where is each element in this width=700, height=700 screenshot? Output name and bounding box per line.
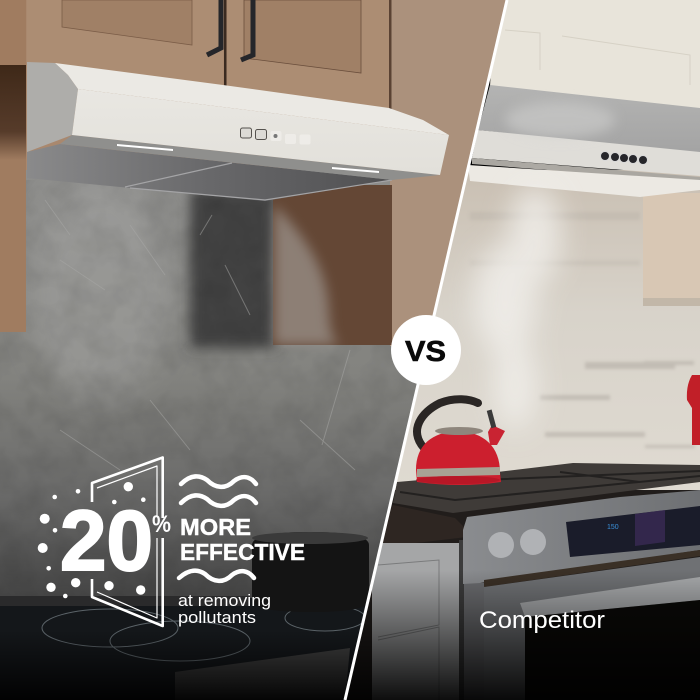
VS badge: VS bbox=[405, 336, 446, 368]
oven handle bbox=[520, 577, 700, 617]
hood dark strip bbox=[472, 158, 700, 182]
wave below headline bbox=[179, 571, 254, 581]
range knob left bbox=[488, 532, 514, 558]
range side trim bbox=[464, 583, 485, 700]
right upper door bbox=[227, 0, 389, 108]
subheading bbox=[178, 592, 271, 627]
left wall cabinet bbox=[0, 0, 26, 332]
hood underside bbox=[468, 165, 700, 197]
bottom dark fade bbox=[340, 570, 700, 700]
range body bbox=[463, 490, 700, 584]
cabinet door outline bbox=[378, 560, 439, 700]
waves above headline bbox=[181, 476, 256, 506]
gas stove grate bbox=[393, 463, 700, 513]
cabinet gap bbox=[389, 0, 392, 110]
backsplash bbox=[0, 170, 417, 598]
left upper door bbox=[27, 0, 223, 85]
right scene: competitor hood bbox=[340, 0, 700, 700]
filter frame bbox=[92, 458, 163, 626]
cabinet gap bbox=[459, 540, 464, 700]
burner rings bbox=[42, 605, 365, 661]
pollutant particles bbox=[38, 482, 146, 598]
inner dark wood bbox=[273, 185, 392, 345]
door gap bbox=[224, 0, 226, 87]
cabinet panel lines bbox=[505, 30, 690, 85]
white base cabinet bbox=[372, 543, 462, 700]
cooktop edge bbox=[0, 596, 250, 606]
left door inset panel bbox=[62, 0, 192, 45]
right door inset panel bbox=[244, 0, 361, 73]
lower appliance panel bbox=[175, 648, 350, 690]
kettle base bbox=[416, 476, 500, 484]
hood controls bbox=[240, 128, 310, 144]
cabinet lower shadow bbox=[643, 298, 700, 306]
tile backsplash bbox=[395, 170, 700, 490]
oven window bbox=[525, 600, 700, 700]
rising steam bbox=[473, 185, 561, 430]
range bottom trim bbox=[484, 550, 700, 587]
hood filter seam bbox=[125, 163, 392, 200]
hood light left bbox=[117, 144, 173, 151]
steam on dark wood bbox=[274, 205, 340, 345]
red kettle bbox=[416, 399, 505, 485]
VS badge bbox=[391, 315, 461, 385]
shadow on left cabinet bbox=[0, 65, 26, 160]
hood knobs bbox=[600, 152, 648, 164]
filter icon with particles bbox=[38, 458, 163, 626]
subheading: at removing bbox=[178, 592, 271, 610]
handle right bbox=[241, 0, 253, 60]
range display bbox=[566, 506, 700, 557]
pot rim bbox=[252, 532, 368, 544]
display glow bbox=[635, 510, 665, 546]
headline: EFFECTIVE bbox=[180, 539, 305, 565]
hood underside bbox=[27, 144, 392, 201]
kettle body bbox=[416, 431, 501, 485]
hood lower lip bbox=[60, 135, 440, 180]
kettle band bbox=[417, 467, 500, 477]
stainless hood canopy bbox=[478, 85, 700, 155]
handle left bbox=[207, 0, 221, 55]
soot stain on backsplash bbox=[190, 190, 276, 348]
subheading: pollutants bbox=[178, 609, 256, 627]
range knob right bbox=[520, 529, 546, 555]
oven door bbox=[484, 557, 700, 700]
20 percent figure: 20 bbox=[60, 494, 153, 589]
competitor label: Competitor bbox=[479, 607, 605, 634]
right wall cabinet side bbox=[390, 0, 512, 346]
20 percent figure: % bbox=[152, 511, 171, 538]
divider line bbox=[345, 0, 507, 700]
dark base bbox=[352, 490, 700, 676]
marble mottling bbox=[0, 193, 390, 500]
kettle lid bbox=[435, 427, 483, 435]
left scene: product range hood bbox=[0, 0, 512, 700]
red pot at edge bbox=[687, 375, 700, 445]
hood top bbox=[55, 63, 449, 135]
wood base bbox=[26, 0, 390, 170]
tile streaks bbox=[470, 212, 695, 448]
cooktop counter bbox=[0, 598, 366, 682]
upper cream cabinets bbox=[490, 0, 700, 110]
hood left side bbox=[27, 62, 78, 152]
marble veins bbox=[45, 200, 355, 470]
smoke haze bbox=[28, 180, 172, 400]
pot on cooktop bbox=[252, 532, 369, 612]
kettle whistle bbox=[487, 410, 496, 428]
headline: MORE bbox=[180, 514, 251, 540]
steam on canopy bbox=[505, 102, 615, 138]
hood front bbox=[72, 89, 449, 175]
countertop granite bbox=[382, 505, 470, 547]
grate bars bbox=[400, 471, 700, 500]
right cream cabinet bbox=[643, 193, 700, 306]
kettle spout bbox=[488, 425, 505, 445]
kettle handle bbox=[417, 399, 478, 448]
headline bbox=[180, 514, 305, 565]
display digits: 150 bbox=[607, 524, 619, 531]
stainless hood front bbox=[472, 130, 700, 176]
bottom dark fade bbox=[0, 636, 354, 700]
hood light right bbox=[332, 167, 379, 173]
